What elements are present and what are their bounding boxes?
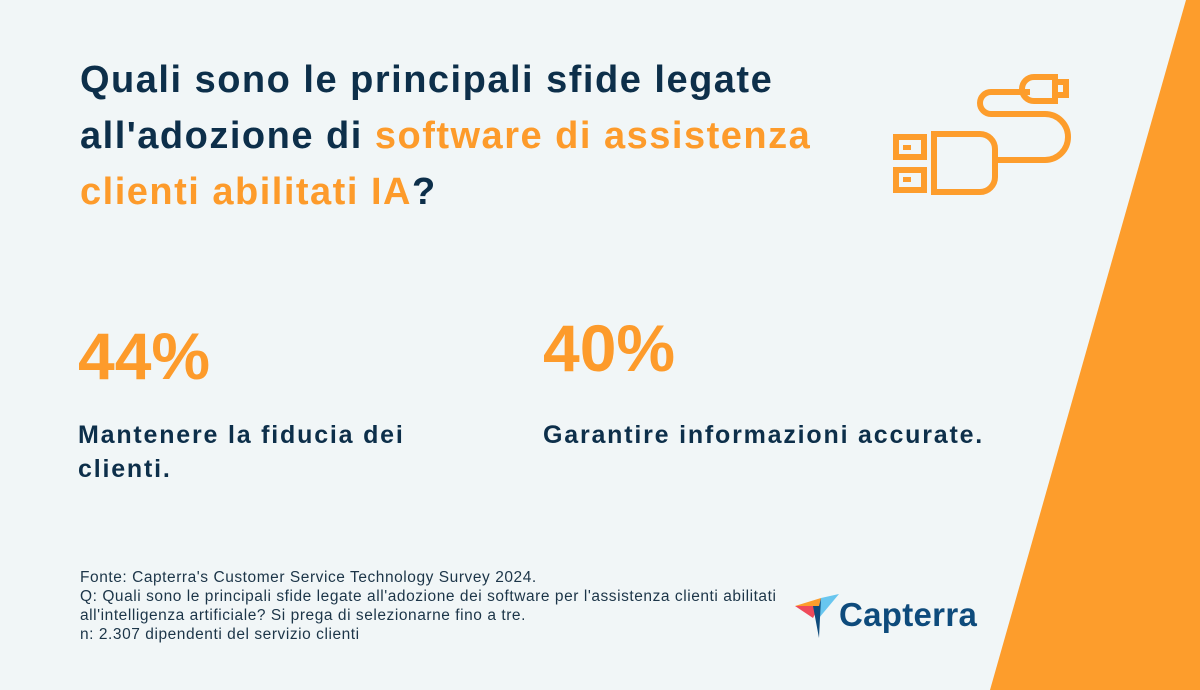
footnote: Q: Quali sono le principali sfide legate all'adozione dei software per l'assistenza clienti abilitati — [80, 588, 776, 605]
stat 1: Mantenere la fiducia dei — [78, 421, 405, 449]
title: all'adozione di software di assistenza — [80, 115, 811, 157]
stat 1 — [78, 319, 405, 483]
footnote — [80, 569, 776, 643]
stat 1: clienti. — [78, 455, 172, 483]
stat 2 — [543, 311, 984, 449]
footnote: Fonte: Capterra's Customer Service Technology Survey 2024. — [80, 569, 537, 586]
title: clienti abilitati IA? — [80, 171, 437, 213]
stat 1: 44% — [78, 319, 210, 393]
footnote: n: 2.307 dipendenti del servizio clienti — [80, 626, 360, 643]
title: Quali sono le principali sfide legate — [80, 59, 773, 101]
logo: Capterra: Capterra — [839, 596, 977, 633]
stat 2: 40% — [543, 311, 675, 385]
icon: usb cable — [893, 74, 1071, 195]
stat 2: Garantire informazioni accurate. — [543, 421, 984, 449]
logo: Capterra — [795, 594, 978, 638]
footnote: all'intelligenza artificiale? Si prega di selezionarne fino a tre. — [80, 607, 526, 624]
title — [80, 59, 811, 213]
